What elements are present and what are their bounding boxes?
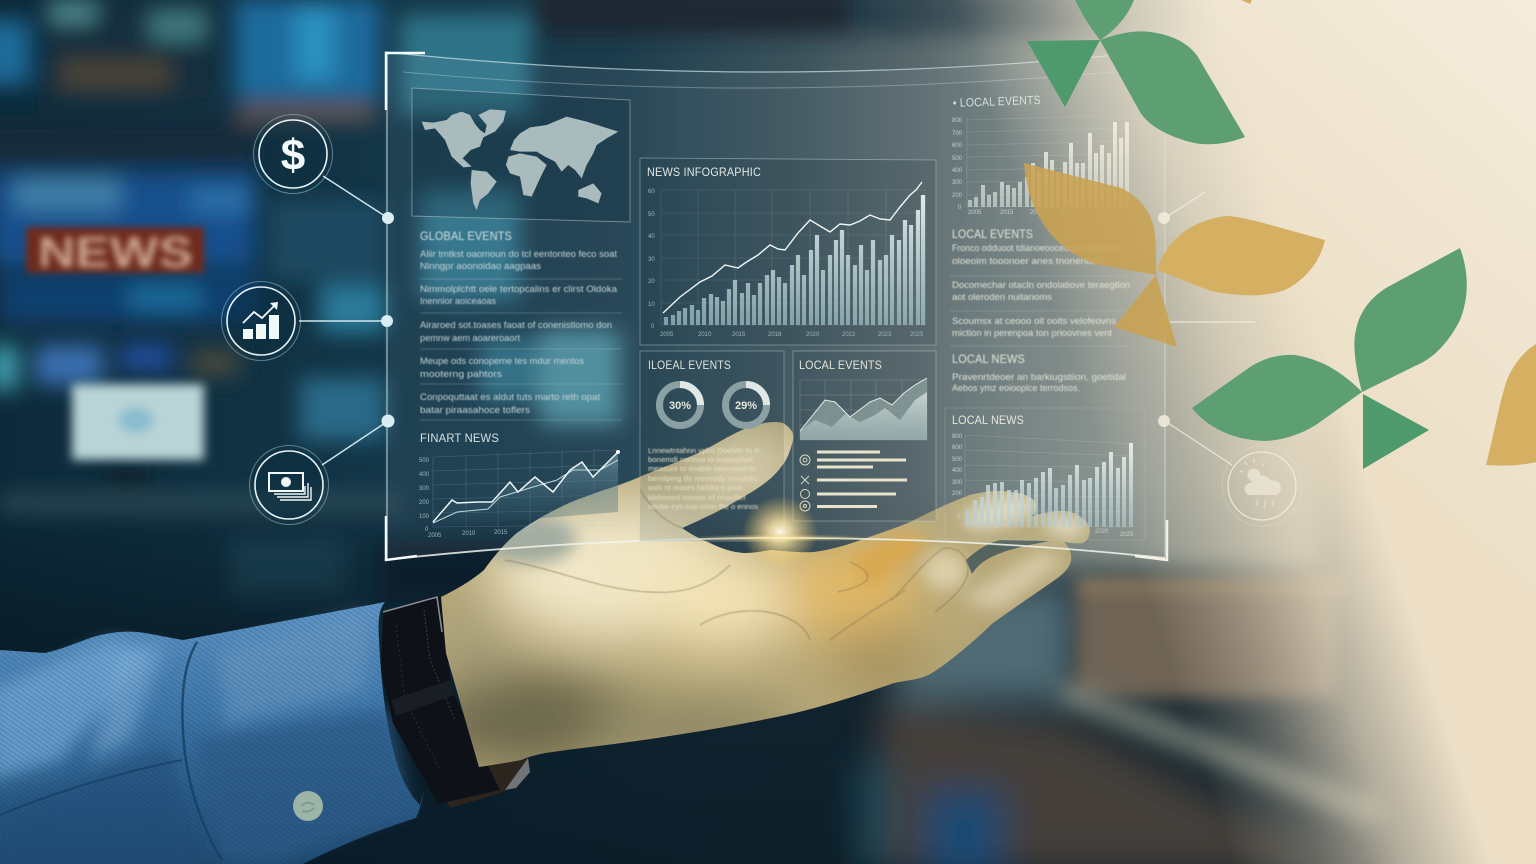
right column: local news chart: 0 (957, 514, 961, 520)
donut 30 percent (660, 384, 700, 426)
finart news line chart: FINART NEWS (420, 431, 499, 445)
leaf motif: gold top sliver (1241, 0, 1252, 4)
finart news line chart: 2025 (555, 529, 569, 535)
hand (441, 422, 1090, 767)
news infographic main chart: 2005 (660, 332, 674, 338)
right column: local events chart: 700 (952, 131, 963, 137)
donut 30 percent: 30% (669, 400, 691, 412)
area chart card: local events: LOCAL EVENTS (799, 358, 882, 372)
right column: local news chart: 400 (952, 468, 963, 474)
hand creases and finger outlines (505, 490, 968, 640)
fingertips (960, 489, 1040, 535)
news infographic main chart: NEWS INFOGRAPHIC (647, 165, 761, 179)
donut card caption: bendping tlo memody oncunlio (648, 476, 758, 483)
cuff seam (182, 642, 222, 860)
background cabinet and lower lights (858, 578, 1380, 864)
finart news line chart: 0 (425, 527, 429, 533)
donut card caption: woh nt maors Nohlia o pore (647, 485, 743, 492)
background monitor (72, 384, 204, 460)
connector: dollar icon (254, 114, 394, 224)
right column: local events text: oloeoim tooonoer anes tnonenten (952, 256, 1100, 267)
right column: local news chart: 200 (952, 491, 963, 497)
right column: local news chart: 600 (952, 445, 963, 451)
global events text block: Inennior aoiceaoas (420, 296, 496, 307)
donut card caption: Lnnewtntahnn ypho Ooefiifo to ih (648, 448, 760, 455)
right column: local events chart: 600 (952, 143, 963, 149)
leaf motif: gold far right (1486, 344, 1536, 466)
finart news line chart: 2010 (462, 531, 476, 537)
glass dashboard panel (385, 50, 1167, 560)
finart news line chart: 200 (419, 500, 430, 506)
right column: local events text (950, 227, 1130, 346)
finart news line chart: 300 (419, 486, 430, 492)
news infographic main chart: 2025 (910, 332, 924, 338)
right column: local news chart: 2025 (1120, 532, 1134, 538)
right column: local events chart: 800 (952, 118, 963, 124)
right column: local news text: LOCAL NEWS (952, 352, 1025, 366)
finart news line chart: 500 (419, 458, 430, 464)
global events text block: Aliir tmtkst oaomoun do tcl eentonteo feco soat (420, 249, 617, 260)
right column: local events text: Fronco odduoot tdianoeooceonten flo Nigh (952, 243, 1118, 254)
leaf motif: green top (1027, 0, 1245, 144)
background news sign: NEWS (38, 228, 193, 277)
finart news line chart: 400 (419, 472, 430, 478)
right column: local events chart: 400 (952, 168, 963, 174)
news infographic main chart: 20 (648, 279, 655, 285)
right column: local events chart: 300 (952, 180, 963, 186)
right column: local events chart: 2015 (1000, 210, 1014, 216)
watch (381, 595, 530, 808)
right column: local events text: aot oleroden nuitanoms (952, 292, 1052, 303)
finart news line chart: 2005 (428, 533, 442, 539)
donut card caption: kleboomt tsoose of nnoufter (648, 495, 747, 502)
news infographic main chart: 2015 (732, 332, 746, 338)
news infographic main chart: 40 (648, 234, 655, 240)
right column: local news text: Pravenrtdeoer an barkiugstiion, goetidal (952, 372, 1126, 383)
global events text block: mooterng pahtors (420, 369, 502, 380)
donut 29 percent (726, 384, 766, 426)
right column: local events chart: 2020 (1060, 210, 1074, 216)
news infographic main chart: 60 (648, 189, 655, 195)
sleeve shading (0, 610, 410, 864)
right column: local news chart: 800 (952, 434, 963, 440)
finart news line chart: 2020 (524, 529, 538, 535)
world map card (412, 88, 630, 222)
donut card caption (647, 448, 760, 511)
right column: local news text (952, 352, 1126, 394)
right column: local news chart: 2020 (1095, 529, 1109, 535)
panel frame (385, 50, 1167, 560)
right column: local news chart: 2005 (965, 521, 979, 527)
right column: local news chart: 300 (952, 480, 963, 486)
horizontal metric bars (817, 450, 907, 508)
leaf motif: gold right petal (1157, 216, 1325, 295)
global events text block: Airaroed sot.toases faoat of conenistlomo don (420, 320, 612, 331)
finart news line chart: 100 (419, 514, 430, 520)
global events text block (420, 229, 622, 420)
right column: local events text: miction in perenpoa ton prioovnes vent (952, 328, 1112, 339)
news infographic main chart: 2023 (878, 332, 892, 338)
right column: local events chart: 2005 (968, 210, 982, 216)
right column: local events chart (952, 93, 1130, 216)
connector: growth chart icon (222, 282, 393, 360)
connector: banknotes icon (250, 414, 394, 524)
finart news line chart (419, 431, 620, 539)
bars (666, 195, 923, 325)
metric row icons (800, 455, 810, 511)
right column: local events text: LOCAL EVENTS (952, 227, 1033, 241)
global events text block: Meupe ods conopeme tes mdur mentos (420, 356, 584, 367)
right column: local events chart: 500 (952, 156, 963, 162)
global events text block: Nimmolplchtt oele tertopcalins er clirst Oldoka (420, 284, 618, 295)
right column: local events chart: • LOCAL EVENTS (953, 93, 1041, 110)
right column: local events chart: 2018 (1030, 210, 1044, 216)
global events text block: GLOBAL EVENTS (420, 229, 512, 243)
donut 29 percent: 29% (735, 400, 757, 412)
right column: local news chart (945, 408, 1145, 540)
shirt sleeve (0, 602, 424, 864)
news infographic main chart: 2020 (806, 332, 820, 338)
global events text block: Nlnngpr aoonoidao aagpaas (420, 261, 541, 272)
grey-cream wash behind dashboard (620, 35, 1320, 570)
right column: local news chart: 2010 (995, 523, 1009, 529)
leaf motif: gold centre (1024, 163, 1177, 347)
right column: local news chart: LOCAL NEWS (952, 413, 1024, 427)
icon: weather cloud (1240, 459, 1281, 508)
gap between fingers (966, 540, 1050, 574)
right side connectors and weather icon (1158, 192, 1302, 526)
global events text block: Conpoquttaat es aldut tuts marto reth opat (420, 392, 600, 403)
finart news line chart: 2015 (494, 530, 508, 536)
sleeve twill texture (0, 602, 424, 864)
cuff button (293, 791, 323, 821)
news infographic main chart: 50 (648, 212, 655, 218)
news infographic main chart (640, 158, 936, 345)
news infographic main chart: 10 (648, 302, 655, 308)
right column: local news text: Aebos ymz eoiooplce terrodsos. (952, 383, 1080, 394)
trend line (663, 182, 922, 313)
news infographic main chart: 2022 (842, 332, 856, 338)
right column: local news chart: 500 (952, 457, 963, 463)
donut card caption: measure to enable nounourenls (648, 466, 757, 473)
donut card caption: bonemdi nonnsa to enpourhalt (648, 457, 753, 464)
area chart card: local events (793, 351, 936, 521)
right column: local events chart: 0 (958, 205, 962, 211)
donut card caption: nenbe eyo tiop onno ffie o ennos (648, 504, 759, 511)
leaf motif: green lower (1192, 248, 1467, 469)
news infographic main chart: 0 (651, 324, 655, 330)
news infographic main chart: 2010 (698, 332, 712, 338)
connector: dollar icon: $ (281, 131, 305, 180)
right column: local events chart: 200 (952, 193, 963, 199)
donut card: local events (640, 351, 784, 541)
donut card: local events: ILOEAL EVENTS (648, 358, 731, 372)
right column: local events text: Docomechar otacln ondolatiove teraegtlon (952, 280, 1130, 291)
panel glass fill (385, 50, 1165, 560)
news infographic main chart: 30 (648, 257, 655, 263)
right column: local events text: Scoumsx at ceooo oit ooits velofeovns (952, 316, 1116, 327)
news infographic main chart: 2018 (768, 332, 782, 338)
global events text block: batar piraasahoce toflers (420, 405, 530, 416)
hand palm light flare (685, 496, 875, 568)
global events text block: pemnw aem aoareroaort (420, 333, 520, 344)
